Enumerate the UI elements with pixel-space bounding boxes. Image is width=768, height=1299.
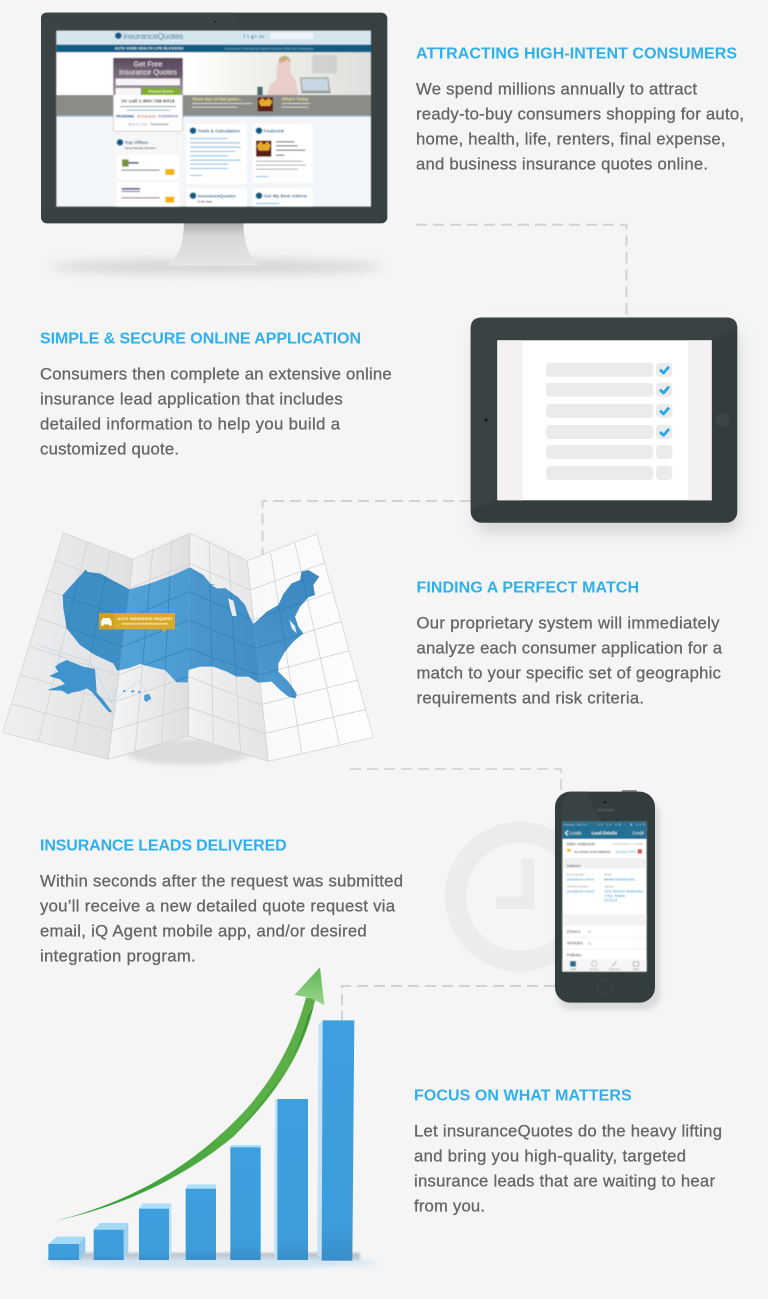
- monitor website screen: Get Free: [134, 60, 162, 69]
- bar 3: [139, 1203, 171, 1260]
- map paper grid lines: [12, 541, 366, 753]
- paragraph: match to your specific set of geographic: [416, 664, 721, 682]
- monitor website screen: MetLife: [129, 122, 147, 126]
- paragraph: you’ll receive a new detailed quote request via: [40, 896, 396, 916]
- monitor website screen: Share day on fast pates...: [192, 97, 242, 102]
- heading: attracting high-intent consumers: ATTRACTING HIGH-INTENT CONSUMERS: [416, 46, 737, 62]
- monitor website screen: What's Today: [282, 97, 309, 102]
- monitor website screen: Great Savings Partners: [125, 146, 156, 150]
- auto insurance request tag: [99, 613, 175, 632]
- phone app screen: Resources: [609, 968, 621, 971]
- phone app screen: 01234: [604, 899, 618, 903]
- paragraph: from you.: [414, 1196, 485, 1216]
- phone app screen: 01/01/2014 1:45PM: [613, 842, 643, 846]
- phone app screen: 10:34 AM ↑ ✱ 31%: [598, 823, 645, 826]
- phone app screen: Phone Number: [567, 872, 585, 876]
- monitor website screen: [56, 31, 371, 207]
- map of the United States: [62, 567, 320, 698]
- phone app screen: (1): [588, 930, 591, 934]
- phone app screen: Account: [590, 968, 599, 971]
- dashed connector: tablet to map: [262, 501, 471, 556]
- paragraph: [416, 614, 723, 708]
- monitor website screen: insuranceQuotes: [123, 31, 183, 41]
- phone app screen: Policies: [567, 952, 582, 957]
- bar 1: [48, 1237, 85, 1260]
- map shadow: [125, 738, 252, 765]
- phone app screen: (2): [588, 941, 591, 945]
- tablet illustration: [471, 318, 738, 532]
- phone app screen: ALLSTATE AUTO PREFER...: [574, 850, 612, 854]
- monitor website screen: AUTO HOME HEALTH LIFE BLOGGING: [115, 47, 184, 51]
- monitor website screen: Insurance Information Agent Options FAQ Get Insurance: [225, 47, 314, 51]
- phone illustration: [555, 790, 660, 1010]
- paragraph: ready-to-buy consumers shopping for auto,: [416, 104, 744, 124]
- monitor website screen: InsuranceQuotes: [198, 193, 236, 198]
- phone body: [622, 790, 637, 793]
- paragraph: home, health, life, renters, final expense,: [416, 130, 726, 148]
- Hawaii: [123, 690, 151, 702]
- paragraph: [40, 364, 392, 458]
- dashed connector: monitor to tablet: [416, 225, 626, 317]
- phone app screen: Billing: [633, 969, 640, 971]
- dashed connector: map to phone: [350, 769, 561, 792]
- phone app screen: (xxx)xxx-xxxx: [567, 878, 595, 882]
- monitor bezel: [41, 13, 387, 223]
- section 4 text block: [40, 838, 403, 966]
- phone app screen: Lead Details: [592, 831, 618, 836]
- heading: finding a perfect match: FINDING A PERFECT MATCH: [416, 580, 639, 596]
- section 1 text block: [416, 46, 744, 174]
- section 2 text block: [40, 330, 392, 458]
- phone app screen: 123 Street Address: [604, 889, 643, 893]
- monitor website screen: Featured: [264, 128, 284, 133]
- phone app screen: Mike Anderson: [567, 842, 596, 847]
- check marks: [660, 367, 669, 435]
- phone app screen: Leads: [570, 831, 581, 836]
- tablet body: [471, 318, 737, 523]
- tablet screen: [497, 340, 712, 500]
- growth bar chart with arrow: [43, 967, 377, 1268]
- paragraph: integration program.: [40, 946, 196, 966]
- monitor website screen: TheHartford: [150, 122, 168, 126]
- paragraph: Within seconds after the request was submitted: [40, 872, 403, 890]
- chart base shadow: [43, 1253, 377, 1268]
- heading: simple and secure online application: SIMPLE & SECURE ONLINE APPLICATION: [40, 330, 361, 348]
- form rows with checkboxes: [546, 363, 672, 480]
- paragraph: We spend millions annually to attract: [416, 80, 697, 98]
- dashed connector: phone to chart: [342, 986, 555, 1020]
- paragraph: [414, 1122, 722, 1216]
- monitor website screen: PROGRESSIVE: [116, 115, 135, 119]
- paragraph: detailed information to help you build a: [40, 414, 341, 434]
- paragraph: Consumers then complete an extensive online: [40, 364, 392, 384]
- inset divider lines: [40, 646, 152, 712]
- paragraph: Our proprietary system will immediately: [416, 614, 720, 632]
- monitor illustration: [41, 13, 387, 274]
- icon: clock watermark: [456, 832, 584, 961]
- folded map illustration: [3, 533, 373, 765]
- monitor website screen: Request Quotes: [148, 90, 174, 94]
- monitor stand: [169, 223, 258, 266]
- bar 6: [274, 1099, 308, 1260]
- section 3 text block: [416, 580, 723, 708]
- monitor website screen: f t g+ in: [243, 34, 264, 40]
- monitor floor shadow: [50, 259, 383, 274]
- bar 5: [230, 1145, 261, 1260]
- monitor website screen: In the news: [198, 200, 213, 204]
- paragraph: [416, 80, 744, 174]
- phone app screen: ●●●●● Sprint: [564, 823, 588, 826]
- paragraph: requirements and risk criteria.: [416, 688, 644, 708]
- paragraph: [40, 872, 403, 966]
- monitor website screen: Get My Best Advice: [264, 193, 307, 198]
- icon: car: [101, 618, 112, 626]
- Alaska: [47, 660, 113, 713]
- phone app screen: anderson@com...: [604, 878, 638, 882]
- phone shadow: [557, 800, 660, 1010]
- paragraph: and business insurance quotes online.: [416, 154, 708, 174]
- paragraph: customized quote.: [40, 440, 179, 458]
- monitor website screen: Tools & Calculators: [198, 128, 240, 133]
- phone app screen: (xxx)xxx-xxxx: [567, 889, 595, 893]
- phone app screen: Leads: [570, 969, 577, 971]
- paragraph: email, iQ Agent mobile app, and/or desired: [40, 922, 367, 940]
- phone app screen: CONTACT: [567, 864, 581, 868]
- phone app screen: Address: [604, 885, 615, 889]
- phone app screen: [562, 822, 647, 972]
- map paper panels: [3, 533, 373, 761]
- paragraph: insurance lead application that includes: [40, 390, 343, 408]
- monitor website screen: FARMERS: [159, 115, 179, 119]
- paragraph: and bring you high-quality, targeted: [414, 1146, 686, 1166]
- monitor website screen: Top Offers: [125, 140, 148, 145]
- phone app screen: Credit: [632, 831, 645, 836]
- auto insurance request tag: AUTO INSURANCE REQUEST: [118, 617, 173, 621]
- section 5 text block: [414, 1088, 722, 1216]
- paragraph: Let insuranceQuotes do the heavy lifting: [414, 1122, 722, 1140]
- phone app screen: Alt Phone Number: [567, 885, 588, 889]
- tablet shadow: [476, 328, 738, 532]
- phone app screen: Vehicles: [567, 941, 583, 946]
- phone app screen: Email: [604, 872, 611, 876]
- monitor website screen: Insurance Quotes: [119, 68, 177, 77]
- paragraph: insurance leads that are waiting to hear: [414, 1172, 715, 1190]
- phone app screen: City, State,: [604, 894, 626, 898]
- growth arrow: [56, 967, 324, 1221]
- phone app screen: Drivers: [567, 929, 580, 934]
- monitor website screen: Allstate: [137, 115, 156, 119]
- heading: insurance leads delivered: INSURANCE LEADS DELIVERED: [40, 838, 287, 854]
- heading: focus on what matters: FOCUS ON WHAT MATTERS: [414, 1088, 632, 1104]
- bar 2: [94, 1223, 128, 1260]
- monitor website screen: Or call 1-800-756-9318: [121, 99, 175, 105]
- paragraph: analyze each consumer application for a: [416, 638, 723, 658]
- phone app screen: Access PDF: [616, 850, 636, 854]
- bar 4: [186, 1184, 216, 1260]
- bar 7: [317, 1020, 354, 1261]
